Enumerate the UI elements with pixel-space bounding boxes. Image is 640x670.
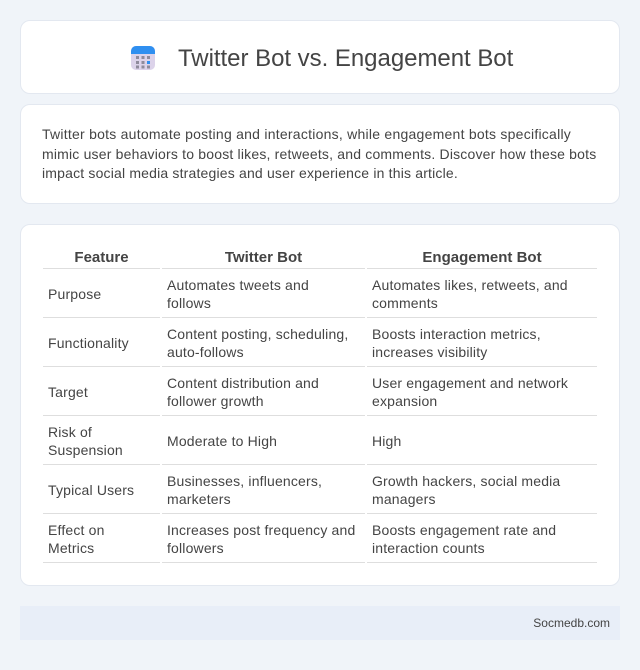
- row: Purpose: Automates tweets and: [167, 277, 309, 293]
- row: Risk of Suspension: [48, 424, 401, 458]
- row: Functionality: Content posting, scheduling,: [167, 326, 348, 342]
- title: Twitter Bot vs. Engagement Bot: [178, 45, 513, 72]
- footer bar: [20, 606, 620, 640]
- row: Typical Users: managers: [372, 491, 436, 507]
- row: Purpose: Purpose: [48, 286, 101, 302]
- panel: intro text: [20, 104, 620, 204]
- panel: title card: [20, 20, 620, 94]
- row: Purpose: comments: [372, 295, 438, 311]
- row: Typical Users: Growth hackers, social media: [372, 473, 560, 489]
- row: Purpose: follows: [167, 295, 211, 311]
- row: Typical Users: marketers: [167, 491, 231, 507]
- row: Effect on Metrics: Metrics: [48, 540, 94, 556]
- row: Functionality: auto-follows: [167, 344, 244, 360]
- row: Typical Users: Businesses, influencers,: [167, 473, 322, 489]
- row: Risk of Suspension: High: [372, 433, 401, 449]
- row: Target: Content distribution and: [167, 375, 319, 391]
- row: Functionality: [48, 326, 541, 360]
- row: Effect on Metrics: followers: [167, 540, 224, 556]
- row: Purpose: [48, 277, 568, 311]
- intro paragraph: Twitter bots automate posting and interactions, while engagement bots specifically: [42, 126, 571, 142]
- row: Risk of Suspension: Moderate to High: [167, 433, 277, 449]
- row: Risk of Suspension: Risk of: [48, 424, 92, 440]
- table header: Twitter Bot: Twitter Bot: [225, 249, 302, 266]
- row: Typical Users: Typical Users: [48, 482, 134, 498]
- row: Target: [48, 375, 568, 409]
- table header: Feature: Feature: [74, 249, 129, 266]
- intro paragraph: mimic user behaviors to boost likes, retweets, and comments. Discover how these bots: [42, 146, 596, 162]
- row: Effect on Metrics: Boosts engagement rate and: [372, 522, 556, 538]
- row: Target: Target: [48, 384, 88, 400]
- table header: Engagement Bot: Engagement Bot: [422, 249, 542, 266]
- intro paragraph: [42, 126, 596, 181]
- row: Effect on Metrics: Increases post frequency and: [167, 522, 355, 538]
- intro paragraph: impact social media strategies and user experience in this article.: [42, 165, 458, 181]
- row: Functionality: Functionality: [48, 335, 129, 351]
- row: Typical Users: [48, 473, 560, 507]
- row: Purpose: Automates likes, retweets, and: [372, 277, 568, 293]
- footer credit: Socmedb.com: [533, 616, 610, 630]
- icon: calendar: [131, 46, 155, 70]
- row: Target: follower growth: [167, 393, 264, 409]
- row: Effect on Metrics: Effect on: [48, 522, 105, 538]
- row: Target: expansion: [372, 393, 437, 409]
- row: Effect on Metrics: interaction counts: [372, 540, 485, 556]
- row: Functionality: Boosts interaction metrics,: [372, 326, 541, 342]
- panel: comparison table: [20, 224, 620, 586]
- row: Risk of Suspension: Suspension: [48, 442, 123, 458]
- row: Functionality: increases visibility: [372, 344, 487, 360]
- row: Effect on Metrics: [48, 522, 556, 556]
- row: Target: User engagement and network: [372, 375, 568, 391]
